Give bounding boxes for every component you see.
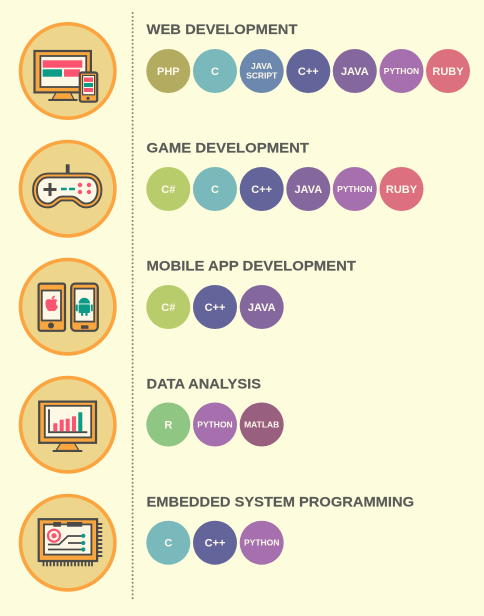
language chips: SCRIPT: [246, 70, 278, 80]
language chips: C++: [205, 538, 225, 550]
language chips: PYTHON: [197, 420, 233, 430]
heading: embedded system programming: EMBEDDED SYSTEM PROGRAMMING: [146, 493, 414, 509]
language chips: PHP: [157, 66, 180, 78]
language chips: C#: [161, 302, 175, 314]
language chips: PYTHON: [384, 66, 419, 76]
language chips: C#: [161, 184, 175, 196]
language chips: [146, 167, 424, 211]
icon: monitor with bar chart: [20, 378, 115, 472]
language chips: C: [211, 184, 219, 196]
heading: mobile app development: MOBILE APP DEVELOPMENT: [146, 258, 356, 274]
language chips: JAVA: [294, 184, 322, 196]
panel: data analysis: [20, 375, 284, 472]
language chips: RUBY: [386, 184, 418, 196]
language chips: C++: [251, 184, 272, 196]
language chips: C++: [298, 66, 319, 78]
language chips: PYTHON: [337, 184, 373, 194]
heading: web development: WEB DEVELOPMENT: [146, 21, 298, 37]
heading: game development: GAME DEVELOPMENT: [146, 139, 309, 155]
icon: circuit board: [20, 496, 115, 590]
language chips: [146, 402, 284, 446]
panel: embedded system programming: [20, 493, 414, 590]
language chips: [146, 285, 284, 329]
language chips: C: [164, 538, 172, 550]
language chips: RUBY: [432, 66, 464, 78]
icon: two smartphones: [20, 260, 115, 354]
panel: game development: [20, 139, 423, 236]
language chips: [146, 521, 284, 565]
language chips: C: [211, 66, 219, 78]
language chips: PYTHON: [244, 538, 279, 548]
heading: data analysis: DATA ANALYSIS: [146, 375, 261, 391]
icon: game controller: [20, 142, 115, 236]
language chips: JAVA: [341, 66, 369, 78]
language chips: MATLAB: [244, 420, 279, 430]
language chips: C++: [205, 302, 225, 314]
language chips: R: [164, 420, 172, 432]
panel: web development: [20, 21, 470, 118]
icon: desktop and phone: [20, 24, 115, 118]
language chips: JAVA: [251, 61, 272, 71]
language chips: [146, 49, 470, 93]
language chips: JAVA: [248, 302, 276, 314]
panel: mobile app development: [20, 258, 356, 354]
